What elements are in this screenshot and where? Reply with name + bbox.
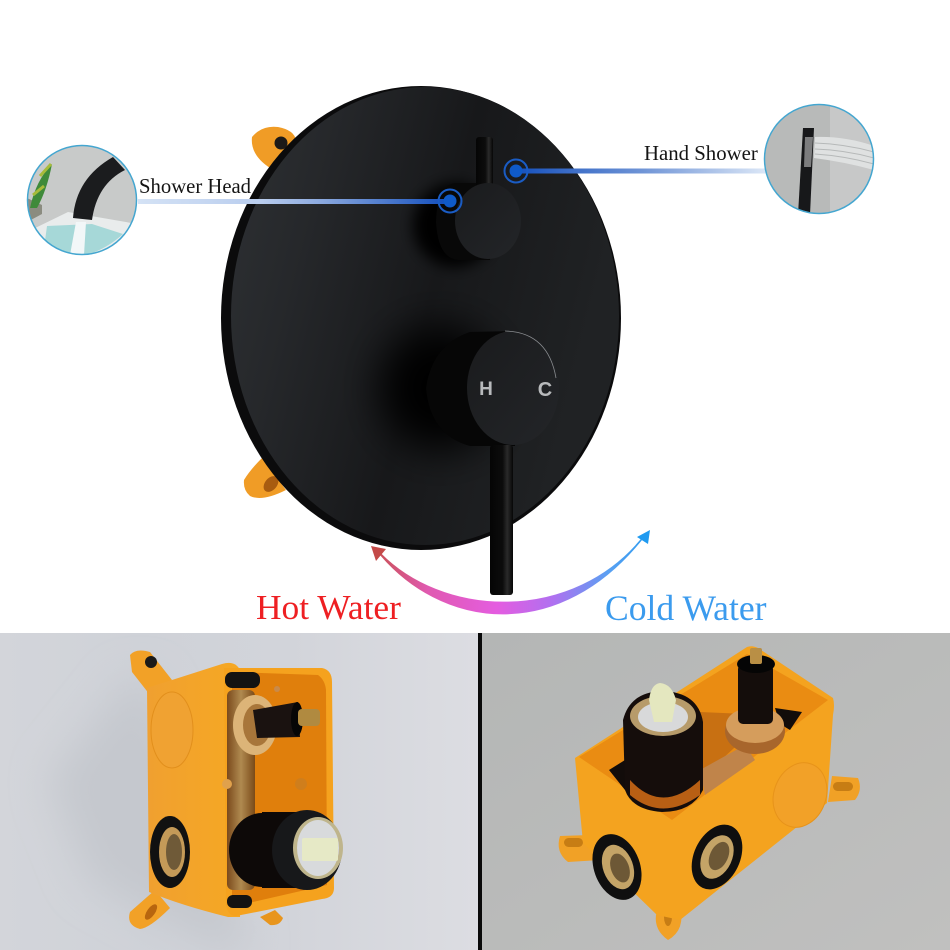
icon: brass diverter base: [700, 707, 785, 795]
icon: main mixer knob with H and C markings: [426, 331, 559, 446]
text: H marking: H: [479, 379, 493, 400]
icon: threaded port right: [682, 816, 752, 898]
icon: round black valve plate: [221, 86, 621, 550]
text: C marking: C: [538, 379, 552, 401]
icon: blue marker on upper knob, hand shower: [504, 160, 528, 182]
panel: product photo on white background: [27, 86, 874, 628]
label: Cold Water: Cold Water: [605, 588, 767, 628]
icon: box interior back wall: [579, 654, 828, 820]
icon: knockout cap: [764, 755, 836, 835]
label: Shower Head: Shower Head: [139, 176, 252, 198]
icon: diverter stem: [737, 648, 775, 724]
label: Hot Water: Hot Water: [256, 587, 401, 627]
icon: orange box interior: [224, 668, 334, 916]
icon: tab slots: [564, 782, 853, 926]
icon: orange mounting tabs behind plate: [244, 127, 296, 498]
divider between photos: [478, 633, 482, 950]
icon: box tabs: [559, 776, 860, 940]
icon: diverter stem: [233, 695, 320, 755]
panel: left photo, rough-in box wall mounted: [0, 633, 478, 950]
panel: right photo, rough-in box on table: [482, 633, 950, 950]
label: Hand Shower: Hand Shower: [644, 142, 758, 165]
icon: interior darker wall: [232, 672, 327, 905]
icon: rubber feet: [225, 672, 260, 908]
icon: mounting tabs: [129, 651, 283, 929]
icon: box outer walls: [575, 646, 834, 920]
arrow: hot to cold gradient arc: [371, 530, 650, 614]
icon: blue marker on upper knob, shower head: [438, 190, 462, 212]
icon: screws: [222, 686, 307, 790]
icon: hand shower thumbnail circle: [764, 104, 874, 215]
icon: brass body pipe: [227, 690, 255, 890]
callout line: hand shower: [516, 168, 768, 174]
icon: knockout cap on side wall: [151, 692, 193, 768]
icon: upper diverter knob and lever: [436, 137, 521, 260]
callout line: shower head: [138, 199, 446, 204]
icon: interior shadow and black gaskets: [609, 708, 802, 805]
icon: orange box outer side wall: [147, 663, 240, 917]
icon: mixer cartridge: [623, 683, 703, 812]
icon: mixer cartridge: [229, 810, 343, 890]
icon: threaded port left: [584, 827, 650, 907]
icon: main lever handle: [490, 445, 513, 595]
icon: threaded inlet port: [150, 816, 190, 888]
icon: shower head thumbnail circle: [27, 145, 137, 258]
